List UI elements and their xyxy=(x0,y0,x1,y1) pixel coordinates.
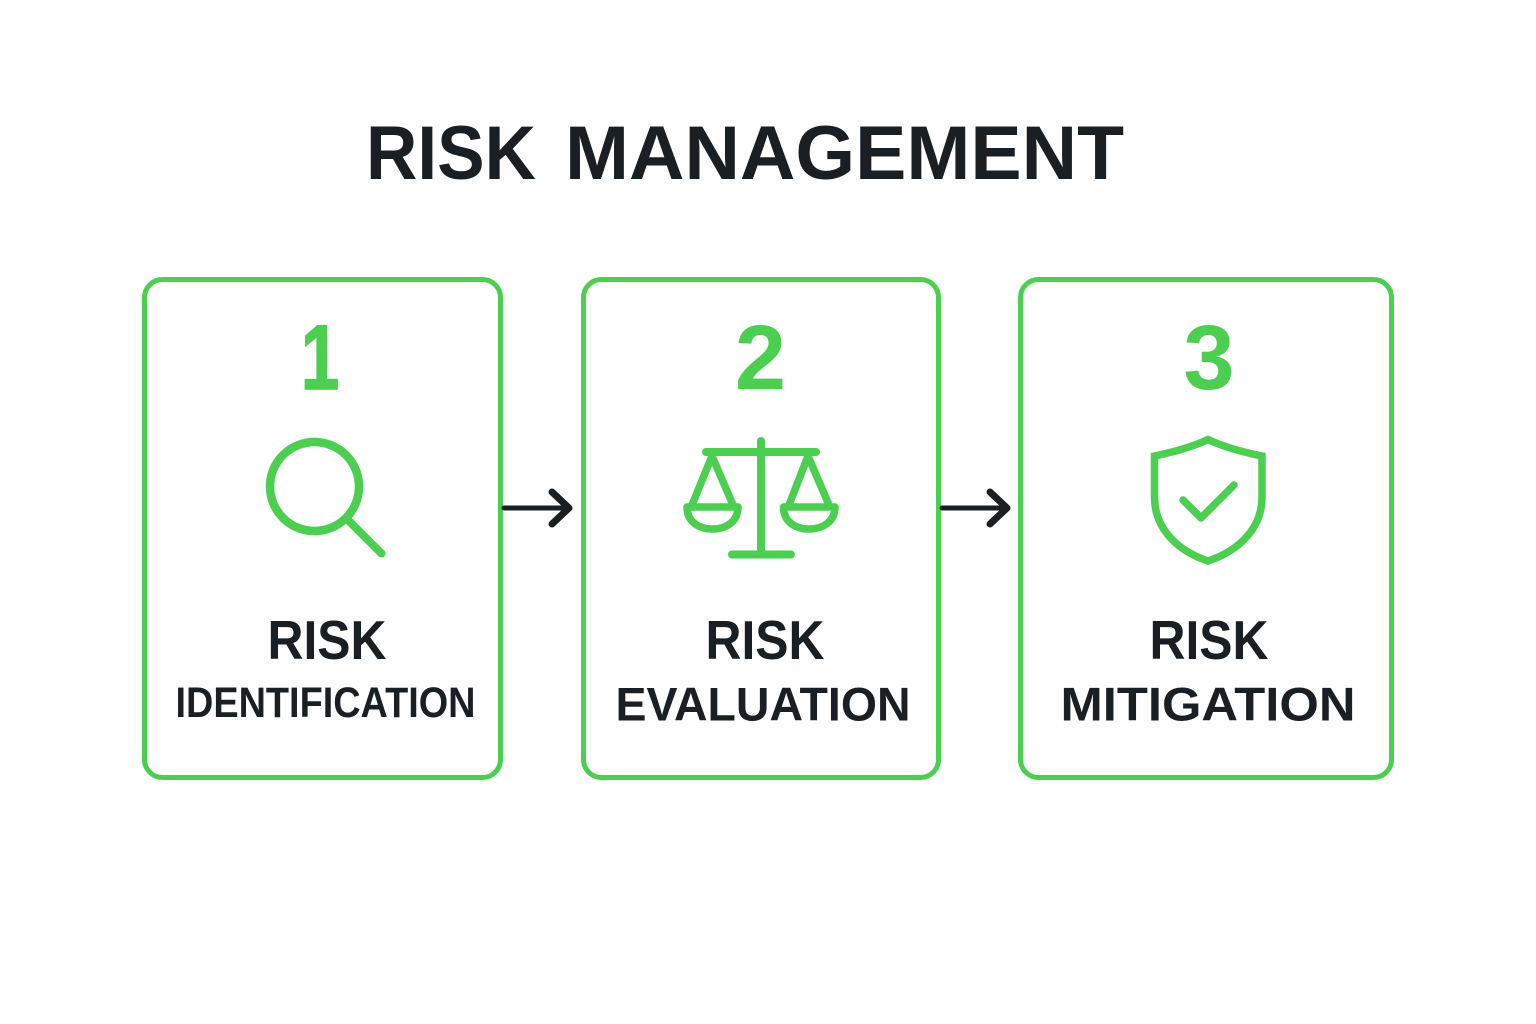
icon: balance scale xyxy=(687,441,835,554)
label: risk identification: RISK xyxy=(268,609,387,671)
icon: magnifying glass xyxy=(270,442,382,554)
label: risk mitigation: RISK xyxy=(1150,609,1269,671)
label: risk evaluation: RISK xyxy=(706,609,825,671)
step number 1: 1 xyxy=(301,306,339,409)
panel: risk mitigation xyxy=(1020,280,1392,778)
label: risk evaluation: EVALUATION xyxy=(616,678,910,730)
label: risk evaluation xyxy=(616,609,910,730)
arrow: step 2 to step 3 xyxy=(942,492,1007,524)
step number 3: 3 xyxy=(1183,307,1235,409)
icon: shield with check xyxy=(1154,440,1262,561)
panel: risk evaluation xyxy=(584,280,938,778)
title: RISK xyxy=(366,111,536,196)
label: risk identification: IDENTIFICATION xyxy=(176,679,476,727)
panel: risk identification xyxy=(144,280,500,778)
title: MANAGEMENT xyxy=(565,111,1124,196)
label: risk mitigation xyxy=(1060,609,1356,730)
label: risk identification xyxy=(176,609,476,727)
label: risk mitigation: MITIGATION xyxy=(1060,678,1356,730)
arrow: step 1 to step 2 xyxy=(504,492,569,524)
step number 2: 2 xyxy=(735,307,786,409)
